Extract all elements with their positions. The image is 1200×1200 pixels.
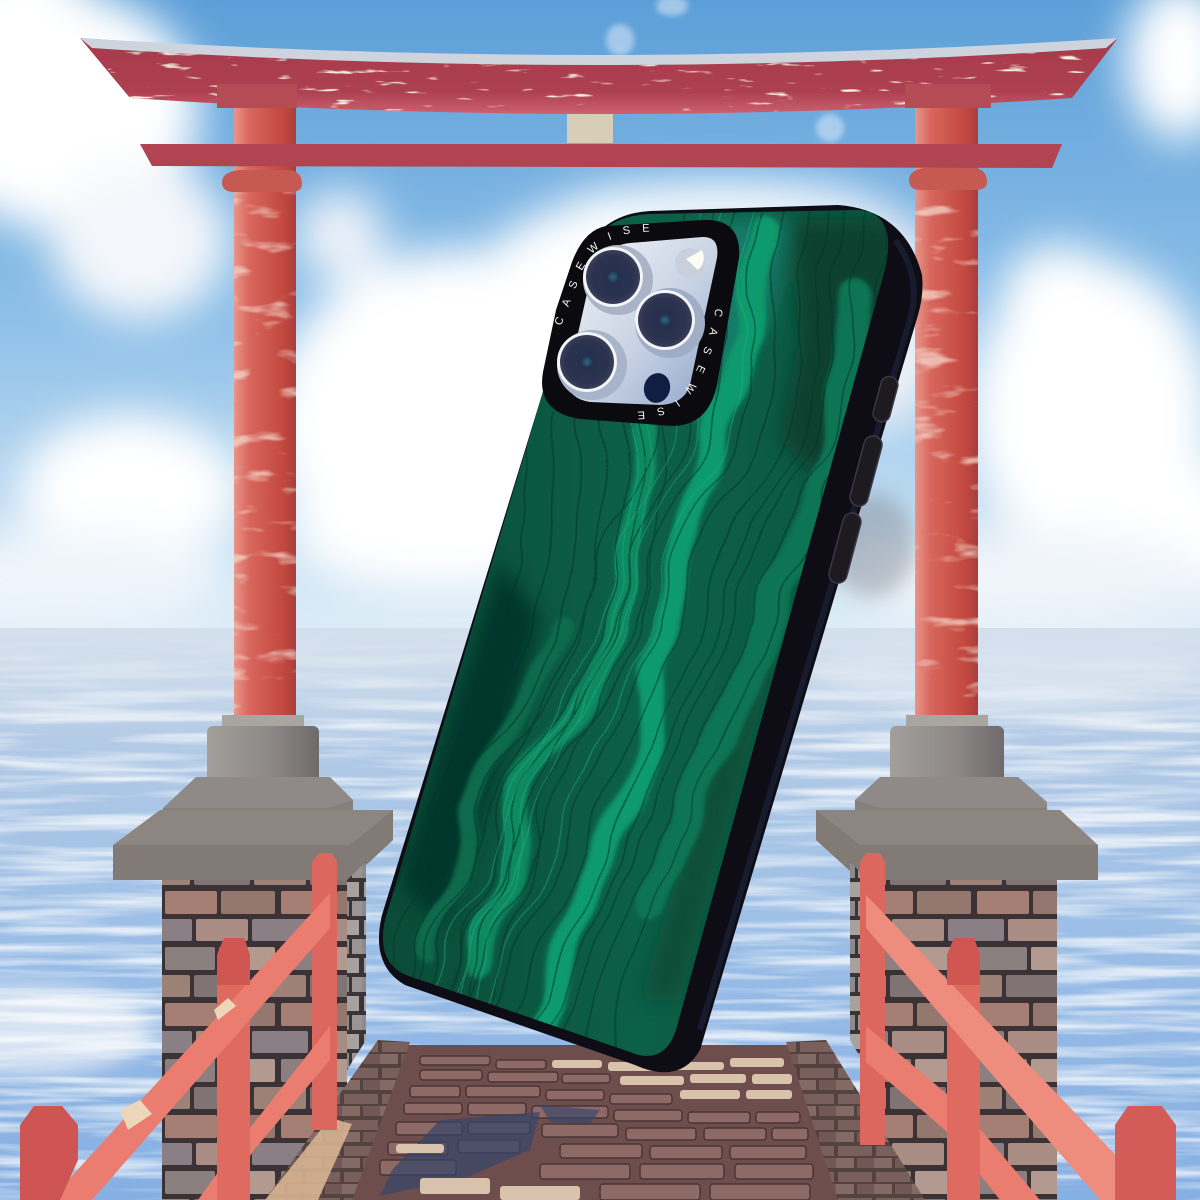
malachite back panel <box>382 210 888 1056</box>
fine banding lines <box>392 210 888 1047</box>
left railing <box>20 853 337 1200</box>
lower rail <box>866 1026 1040 1200</box>
corner post <box>20 1106 78 1200</box>
bright mineral bands <box>430 225 860 1040</box>
lower rail <box>198 1026 330 1200</box>
side wall highlight <box>700 240 914 1030</box>
near post cap <box>217 938 250 985</box>
lens top left <box>583 245 653 315</box>
case body and side wall <box>379 205 922 1072</box>
torii gate <box>80 38 1118 717</box>
camera ring <box>542 220 739 426</box>
left stone pedestal <box>113 715 393 1200</box>
far post <box>860 853 885 1145</box>
near post <box>217 938 250 1200</box>
right stone pedestal <box>816 715 1098 1200</box>
top beam <box>80 38 1118 114</box>
sky background <box>0 0 1200 630</box>
flash <box>675 248 705 278</box>
left pillar <box>222 105 302 717</box>
right railing <box>860 853 1176 1200</box>
upper rail <box>866 895 1130 1200</box>
lens bottom <box>557 330 627 400</box>
left curb <box>265 1040 410 1200</box>
camera bump <box>542 220 740 426</box>
clouds <box>0 0 1200 630</box>
stone walkway <box>265 1040 925 1200</box>
phone in malachite case <box>378 205 922 1072</box>
brand text on ring, upper left: CASEWISE <box>555 224 650 324</box>
near post cap <box>947 938 980 985</box>
puddles <box>380 1112 540 1196</box>
upper rail <box>50 893 330 1200</box>
corner post <box>1115 1106 1176 1200</box>
lower beam <box>140 144 1062 168</box>
brand text on ring, lower right: CASEWISE <box>638 309 722 420</box>
camera plate <box>568 237 717 405</box>
side buttons <box>827 375 900 585</box>
pillar caps <box>217 84 991 108</box>
right pillar <box>909 105 987 717</box>
far post <box>312 853 337 1130</box>
microphone sensor <box>641 370 673 406</box>
sunlit stones <box>396 1058 792 1200</box>
near post <box>947 938 980 1200</box>
centre strut <box>567 105 613 143</box>
sea <box>0 628 1200 1200</box>
lens right <box>635 288 705 358</box>
right curb <box>786 1040 925 1200</box>
